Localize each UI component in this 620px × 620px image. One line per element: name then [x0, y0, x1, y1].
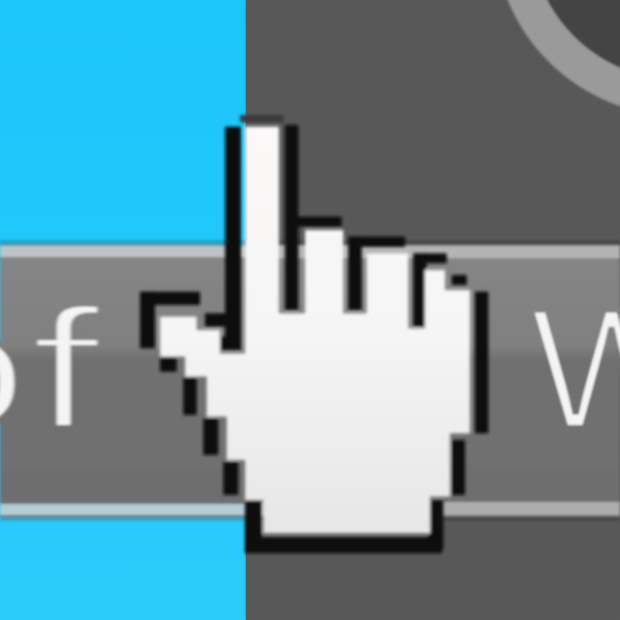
hand fill: [160, 127, 470, 533]
background: blue left panel: [0, 0, 246, 620]
background: dark grey right panel: [246, 0, 620, 620]
banner band: [0, 240, 620, 521]
hand outline: [140, 115, 488, 553]
icon: pointing hand cursor: [140, 115, 488, 553]
